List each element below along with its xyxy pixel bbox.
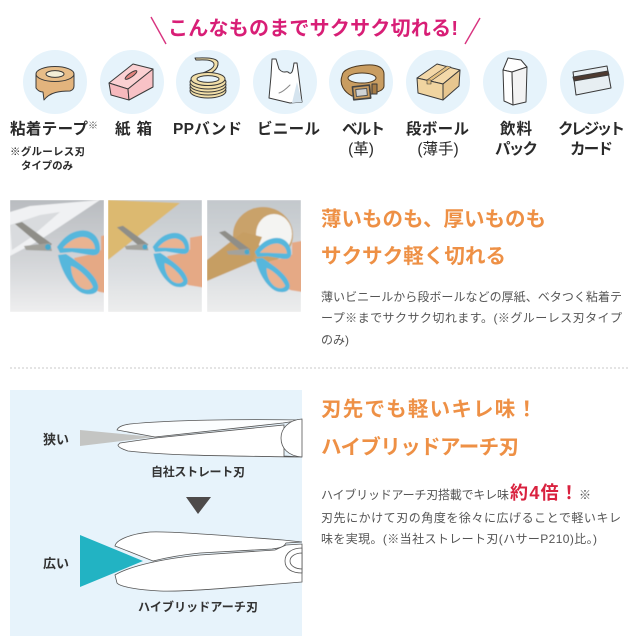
label: 段ボール(薄手): 段ボール: [406, 120, 469, 138]
label: 粘着テープ: 粘着テープ: [10, 119, 88, 138]
icon: coil of band: [190, 58, 226, 98]
text block: hybrid arch description: 刃先にかけて刃の角度を徐々に広げることで軽いキレ: [321, 511, 621, 525]
panel: blade comparison diagram: [10, 390, 302, 636]
icon: tissue box: [109, 64, 153, 100]
label: ベルト(革): [342, 121, 385, 158]
diagram: hybrid arch blade: [115, 532, 302, 591]
arrow: downward triangle: [186, 497, 211, 514]
text block: hybrid arch description: 味を実現。(※当社ストレート刃(ハサーP210)比。): [321, 531, 597, 546]
label: ベルト(革): ベルト: [342, 121, 385, 138]
icon: credit card: [573, 66, 611, 95]
label: クレジットカード: カード: [570, 140, 613, 158]
text block: hybrid arch description: ※: [579, 488, 591, 502]
label: 段ボール(薄手): (薄手): [417, 140, 459, 158]
heading: thin and thick: [321, 208, 546, 268]
icon: teal wide angle: [80, 535, 143, 587]
icon: plastic bag: [269, 59, 302, 103]
heading: hybrid arch blade: [321, 398, 537, 459]
label: ハイブリッドアーチ刃: ハイブリッドアーチ刃: [138, 599, 258, 614]
text block: thin and thick description: ープ※までサクサク切れます。(※グルーレス刃タイプ: [321, 311, 622, 325]
label: ベルト(革): (革): [348, 140, 374, 158]
item: vinyl bag: [253, 50, 320, 138]
label: 粘着テープ: ※グルーレス刃: [10, 145, 85, 158]
photo: cutting vinyl: [10, 200, 104, 312]
label: クレジットカード: [558, 120, 625, 158]
text block: hybrid arch description: [321, 483, 621, 546]
icon: tape roll: [36, 66, 74, 100]
item: tape: [10, 50, 98, 172]
text block: thin and thick description: 薄いビニールから段ボールなどの厚紙、ベタつく粘着テ: [321, 289, 622, 304]
icon: milk carton: [503, 58, 527, 105]
item: belt: [329, 50, 393, 158]
photo: cutting cardboard: [108, 200, 210, 312]
item: credit card: [558, 50, 625, 158]
label: 広い: 広い: [43, 556, 69, 571]
label: 粘着テープ: [10, 119, 98, 172]
heading: thin and thick: 薄いものも、厚いものも: [321, 208, 546, 231]
icon: gray narrow angle: [80, 430, 155, 446]
heading: hybrid arch blade: ハイブリッドアーチ刃: [321, 435, 519, 459]
text block: thin and thick description: のみ): [321, 333, 349, 347]
heading: thin and thick: サクサク軽く切れる: [321, 245, 506, 268]
label: 飲料パック: [495, 120, 538, 158]
label: クレジットカード: クレジット: [558, 120, 625, 138]
label: PPバンド: PPバンド: [173, 121, 242, 138]
text block: thin and thick description: [321, 289, 622, 347]
label: 粘着テープ: ※: [88, 121, 98, 132]
label: 紙箱: 紙 箱: [115, 119, 152, 138]
label: 飲料パック: パック: [495, 140, 538, 158]
photo: cutting packing tape: [207, 200, 301, 312]
item: PP band: [173, 50, 242, 138]
icon: cardboard box: [417, 64, 460, 100]
label: 粘着テープ: タイプのみ: [21, 160, 74, 172]
icon: leather belt: [341, 65, 384, 100]
label: 段ボール(薄手): [406, 120, 469, 158]
item: corrugated box: [406, 50, 470, 158]
diagram: straight blade: [117, 419, 302, 457]
heading: hybrid arch blade: 刃先でも軽いキレ味！: [321, 398, 537, 421]
item: drink carton: [483, 50, 547, 158]
item: paper box: [100, 50, 164, 138]
text block: hybrid arch description: ハイブリッドアーチ刃搭載でキレ味: [321, 487, 509, 502]
text block: hybrid arch description: 約4倍！: [510, 483, 578, 503]
title: heading with slanted lines: こんなものまでサクサク切れる!: [168, 17, 458, 40]
label: ビニール: ビニール: [257, 119, 320, 138]
label: 自社ストレート刃: 自社ストレート刃: [151, 464, 245, 479]
label: 飲料パック: 飲料: [500, 120, 532, 138]
label: 狭い: 狭い: [43, 432, 69, 447]
